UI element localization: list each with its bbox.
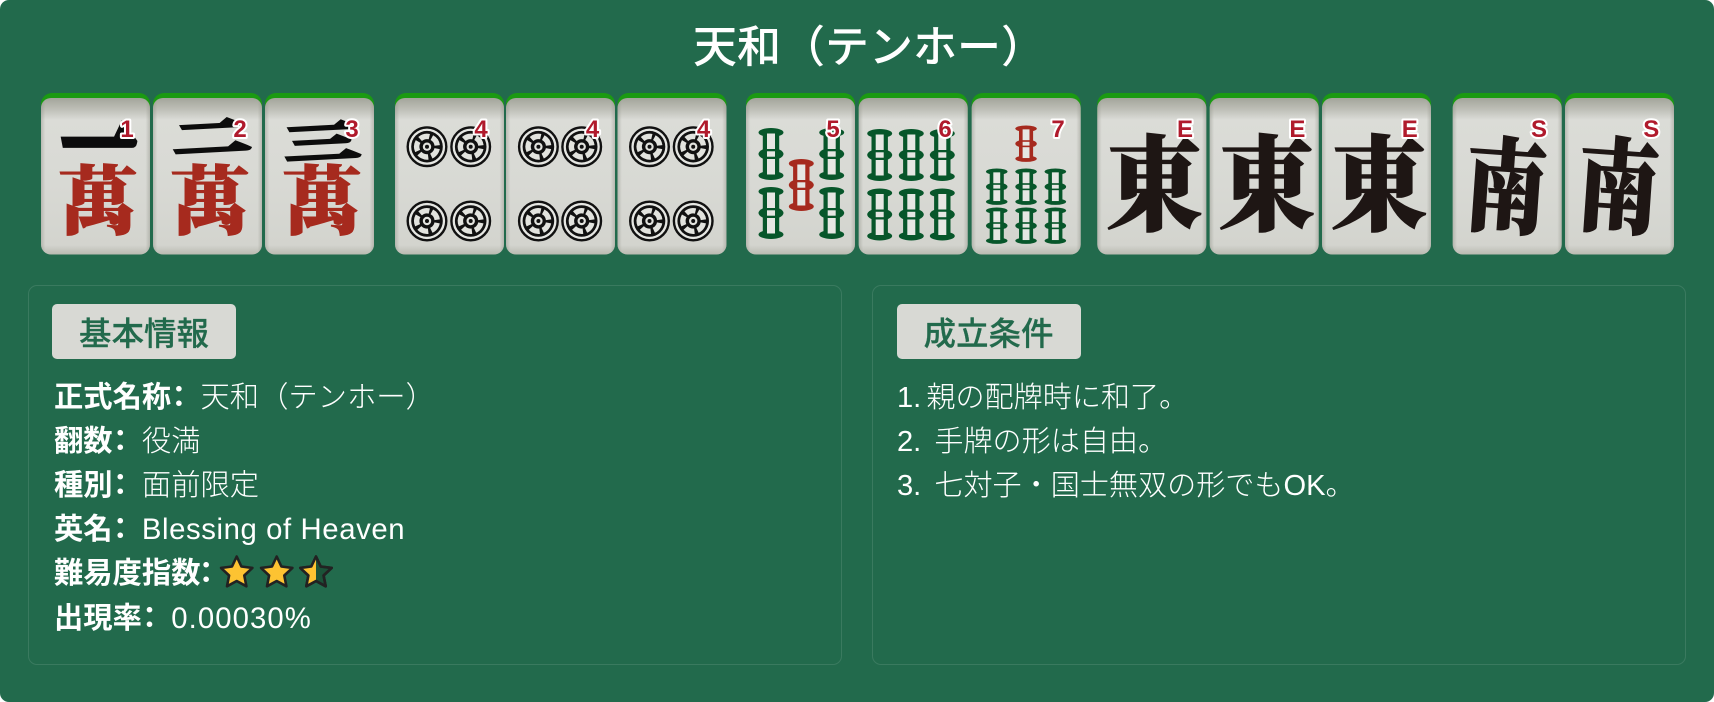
tile: 7 sou: 7 (1051, 116, 1065, 143)
tile: 2 man: 二 (173, 104, 251, 167)
tile: 3 man: 三 (284, 108, 360, 172)
tile: 2 man (153, 93, 262, 254)
condition 3: 3. 七対子・国士無双の形でもOK。 (897, 470, 1355, 502)
tile row (41, 60, 1674, 257)
tile: 3 man: 3 (345, 116, 359, 143)
tile: 1 man (41, 60, 150, 255)
tile: 4 pin: 4 (697, 116, 711, 143)
info: English name: 英名：Blessing of Heaven (54, 513, 405, 546)
tile: south: 南 (1461, 104, 1551, 257)
tile: 5 sou: 5 (826, 116, 840, 143)
tile: 5 sou (746, 93, 855, 254)
info: han count: 翻数：役満 (54, 425, 200, 458)
tile: 1 man: 一 (62, 60, 136, 217)
info: official name: 正式名称：天和（テンホー） (54, 381, 435, 414)
condition 2: 2. 手牌の形は自由。 (897, 426, 1167, 458)
info: difficulty: 難易度指数： (54, 557, 221, 590)
tile: east: E (1177, 116, 1193, 143)
tile: east: 東 (1331, 103, 1428, 252)
tile: 4 pin: 4 (474, 116, 488, 143)
tile: 4 pin: 4 (586, 116, 600, 143)
tile: 6 sou (859, 93, 968, 254)
tile: 4 pin (618, 93, 726, 254)
tile: 2 man: 萬 (170, 143, 250, 250)
tile: 1 man: 1 (120, 116, 134, 143)
panel: conditions (872, 285, 1686, 665)
info: appearance rate: 出現率：0.00030% (54, 602, 312, 635)
tile: east: 東 (1218, 103, 1316, 252)
tile: 2 man: 2 (233, 116, 247, 143)
tile: 3 man: 萬 (282, 143, 362, 250)
tile: east: 東 (1106, 103, 1203, 252)
title: 天和（テンホー） (693, 23, 1045, 72)
tile: south: S (1531, 116, 1547, 143)
tile: east: E (1289, 116, 1305, 143)
panel: basic info (28, 285, 842, 665)
tile: 4 pin (395, 93, 504, 254)
tile: south: 南 (1574, 104, 1664, 257)
condition 1: 1. 親の配牌時に和了。 (897, 382, 1188, 414)
heading: basic info: 基本情報 (79, 316, 209, 352)
tile: 4 pin (506, 93, 615, 254)
tile: 7 sou (972, 93, 1081, 254)
info: type: 種別：面前限定 (54, 469, 259, 502)
tile: 1 man: 萬 (58, 143, 138, 250)
heading: basic info (52, 304, 236, 359)
tile: east: E (1402, 116, 1418, 143)
tile: 3 man (265, 93, 374, 254)
tile: 6 sou: 6 (938, 116, 952, 143)
heading: conditions: 成立条件 (923, 316, 1054, 352)
icon: difficulty stars (220, 555, 333, 588)
heading: conditions (896, 304, 1080, 359)
tile: south: S (1643, 116, 1659, 143)
